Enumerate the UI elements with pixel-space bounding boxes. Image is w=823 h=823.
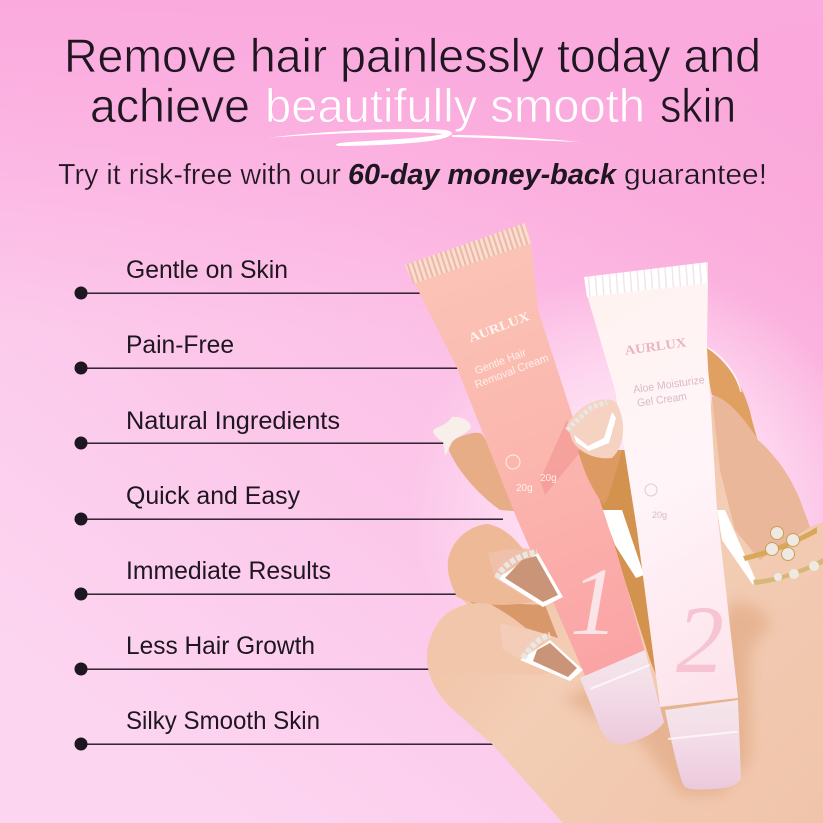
subtitle: 60-day money-back	[348, 159, 618, 191]
tube 2 numeral: 2	[676, 586, 724, 693]
hand holding tubes	[405, 223, 823, 823]
front finger upper with nail	[448, 524, 563, 607]
title: skin	[660, 79, 736, 132]
white sliver beside tube	[717, 510, 755, 585]
title: beautifully smooth	[265, 79, 645, 132]
title: Remove hair painlessly today and	[64, 29, 761, 82]
benefit: Immediate Results: Immediate Results	[126, 557, 331, 585]
tube 2 label	[624, 333, 707, 410]
benefit: Gentle on Skin: Gentle on Skin	[126, 256, 288, 284]
benefit: Immediate Results	[74, 557, 461, 600]
tube 2 cap	[665, 700, 741, 790]
tube 1 pink	[405, 223, 664, 744]
tube 1 shadow from finger	[540, 420, 582, 495]
benefit: Silky Smooth Skin: Silky Smooth Skin	[126, 707, 320, 735]
middle finger nail over tubes	[567, 399, 623, 505]
tube 2 white	[584, 262, 741, 790]
gold rings	[743, 526, 823, 585]
bow nail	[433, 417, 471, 455]
white long nail	[602, 510, 644, 578]
benefit: Pain-Free: Pain-Free	[126, 331, 234, 359]
long orange nail	[707, 348, 757, 438]
subtitle	[58, 159, 767, 191]
tube 1 label: Gentle Hair	[473, 347, 528, 377]
shadow between front fingers	[470, 602, 558, 638]
tube 1 body	[414, 243, 645, 680]
lower nail	[520, 640, 583, 681]
benefit: Quick and Easy: Quick and Easy	[126, 482, 300, 510]
upper nail	[497, 553, 563, 607]
tube 2 icon and weight: 20g	[652, 510, 667, 520]
palm shadow	[563, 600, 770, 795]
tube 1 icon and weight: 20g	[516, 483, 533, 494]
benefit: Less Hair Growth	[74, 632, 434, 676]
front finger lower with nail	[428, 603, 583, 681]
tube 1 label	[456, 307, 550, 391]
orange shadow between tubes	[578, 450, 668, 705]
tube 1 icon and weight: 20g	[540, 473, 557, 484]
tube 1 numeral: 1	[570, 548, 618, 655]
tube 1 label: Removal Cream	[473, 352, 550, 391]
right finger	[707, 348, 810, 585]
small finger behind tube	[447, 433, 525, 512]
tube 2 crimp	[584, 262, 708, 297]
tube 2 label: Aloe Moisturize	[632, 374, 705, 396]
benefits list	[74, 256, 503, 750]
tube 2 icon and weight	[645, 484, 667, 520]
tube 1 cap	[580, 650, 664, 744]
benefit: Gentle on Skin	[74, 256, 421, 300]
palm and back fingers	[427, 394, 823, 823]
tube 2 label: Gel Cream	[636, 391, 688, 410]
tube 1 label: AURLUX	[466, 308, 532, 345]
white underline swoosh	[267, 129, 580, 146]
subtitle: guarantee!	[624, 159, 767, 191]
tube 2 body	[587, 282, 738, 707]
tube 1 crimp	[405, 223, 531, 284]
benefit: Less Hair Growth: Less Hair Growth	[126, 632, 315, 660]
title	[64, 29, 761, 132]
benefit: Quick and Easy	[74, 482, 503, 526]
benefit: Natural Ingredients: Natural Ingredients	[126, 407, 340, 435]
tube 1 icon and weight	[506, 455, 557, 494]
benefit: Natural Ingredients	[74, 407, 447, 450]
title: achieve	[90, 79, 250, 132]
benefit: Pain-Free	[74, 331, 461, 374]
tube 2 label: AURLUX	[624, 334, 688, 358]
benefit: Silky Smooth Skin	[74, 707, 499, 750]
subtitle: Try it risk-free with our	[58, 159, 341, 191]
